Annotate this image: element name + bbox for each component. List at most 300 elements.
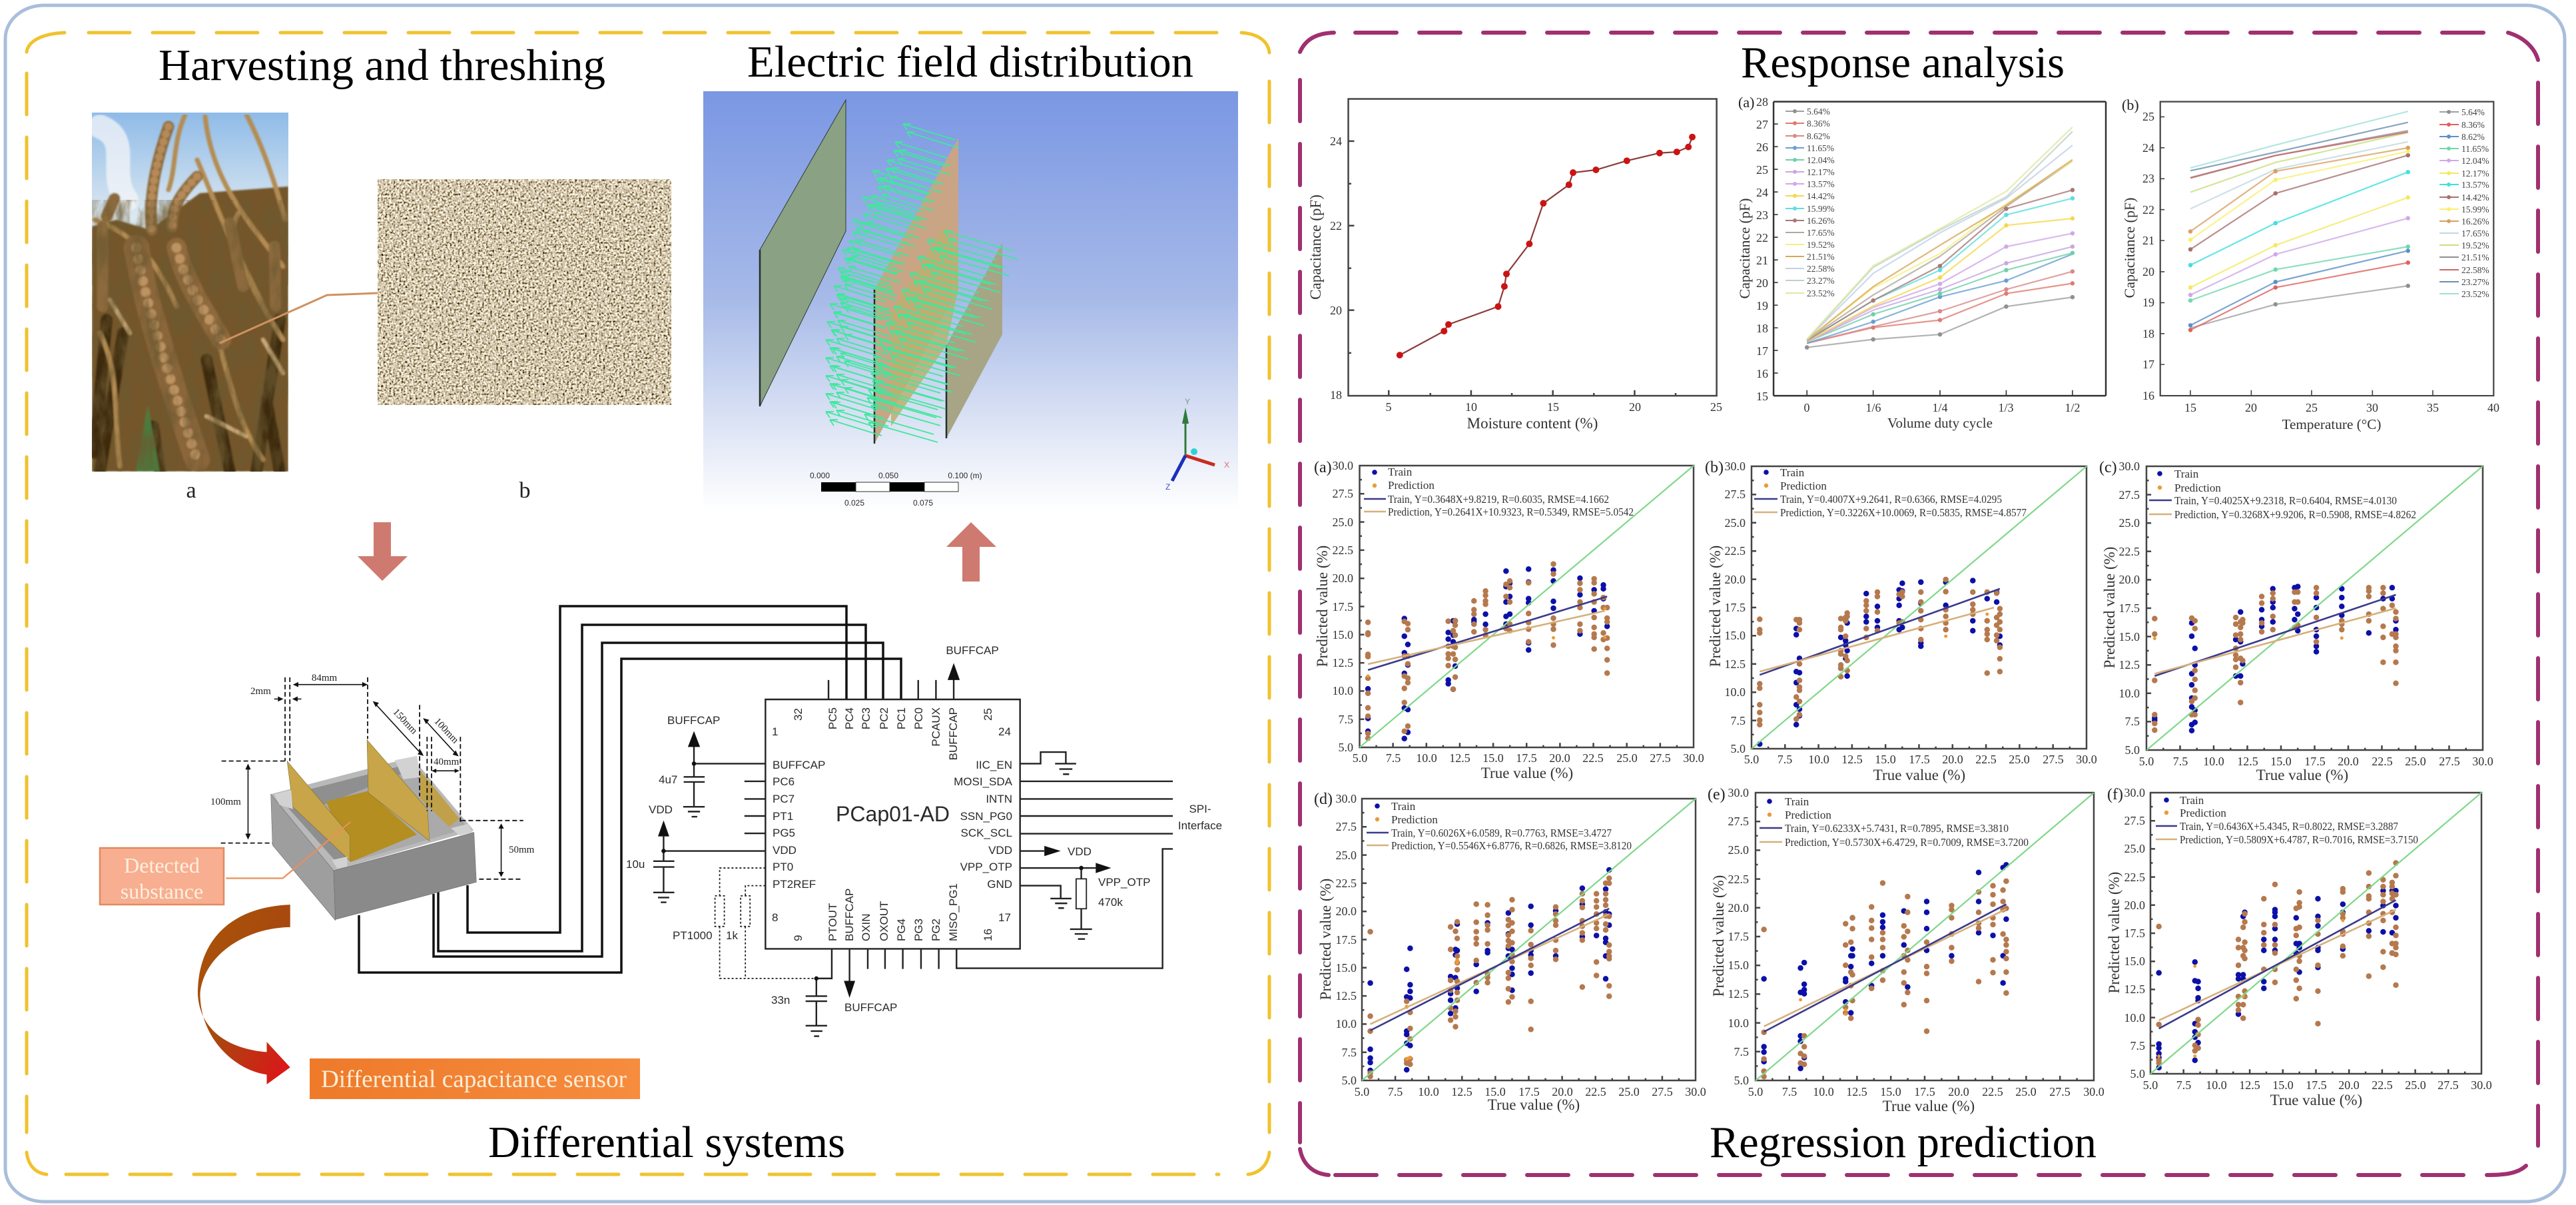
scatter (e): 5.0 bbox=[1748, 1085, 1763, 1098]
scatter (d): 30.0 bbox=[1685, 1085, 1706, 1098]
center plate bbox=[874, 138, 958, 444]
circuit text: 33n bbox=[771, 994, 790, 1006]
chart: capacitance vs volume duty cycle: 26 bbox=[1756, 141, 1768, 154]
scatter (f): True value (%) bbox=[2270, 1092, 2362, 1108]
circuit text: BUFFCAP bbox=[946, 644, 999, 657]
scatter (f) bbox=[2106, 786, 2492, 1108]
title: Response analysis: Response analysis bbox=[1741, 38, 2065, 87]
scatter (b): 22.5 bbox=[1975, 753, 1997, 766]
circuit text: 4u7 bbox=[659, 773, 677, 786]
scatter (d): 20.0 bbox=[1336, 905, 1357, 918]
scatter (f): 20.0 bbox=[2124, 899, 2145, 912]
scatter (c): 12.5 bbox=[2237, 755, 2258, 768]
scatter (f): 12.5 bbox=[2239, 1078, 2260, 1092]
leader to callout bbox=[226, 822, 351, 879]
scatter (e): 10.0 bbox=[1728, 1016, 1749, 1030]
circuit text: PT2REF bbox=[773, 878, 816, 891]
scatter (b): 5.0 bbox=[1730, 742, 1746, 755]
chart: capacitance vs temperature: 20 bbox=[2142, 265, 2154, 278]
axis triad bbox=[1165, 397, 1229, 492]
legend: Prediction, Y=0.5546X+6.8776, R=0.6826, RMSE=3.8120 bbox=[1391, 839, 1632, 852]
scatter (a): 5.0 bbox=[1339, 741, 1353, 754]
scatter (c): 27.5 bbox=[2439, 755, 2460, 768]
scatter (f): 5.0 bbox=[2143, 1078, 2158, 1092]
legend: Prediction, Y=0.3268X+9.9206, R=0.5908, RMSE=4.8262 bbox=[2174, 508, 2416, 521]
scatter (b): 12.5 bbox=[1841, 753, 1863, 766]
legend: 13.57% bbox=[2461, 180, 2489, 190]
scatter (f): 20.0 bbox=[2338, 1078, 2360, 1092]
legend: 11.65% bbox=[1807, 143, 1834, 153]
circuit text: VPP_OTP bbox=[1098, 876, 1150, 889]
circuit text: 24 bbox=[998, 725, 1011, 738]
scatter (f): 17.5 bbox=[2306, 1078, 2327, 1092]
scatter (c): 20.0 bbox=[2119, 573, 2140, 586]
legend: 15.99% bbox=[2461, 204, 2489, 214]
legend bbox=[1760, 795, 2029, 849]
legend: Prediction bbox=[2174, 482, 2221, 494]
title: Regression prediction: Regression prediction bbox=[1710, 1118, 2096, 1167]
circuit text: PC6 bbox=[773, 775, 795, 788]
legend: Train bbox=[2180, 794, 2204, 807]
scatter (d): 12.5 bbox=[1451, 1085, 1472, 1098]
scale bar: 0.000 bbox=[810, 471, 830, 480]
legend: Train bbox=[1388, 466, 1413, 478]
scatter (e): 20.0 bbox=[1728, 901, 1749, 915]
panel: right magenta dashed frame bbox=[1300, 33, 2538, 1175]
chart: capacitance vs moisture content: 18 bbox=[1330, 388, 1342, 402]
chart: capacitance vs moisture content: Capacitance (pF) bbox=[1307, 195, 1324, 300]
scatter (d): 10.0 bbox=[1336, 1017, 1357, 1030]
scatter (d): 10.0 bbox=[1418, 1085, 1439, 1098]
circuit text: MOSI_SDA bbox=[954, 775, 1013, 788]
scatter (e): 10.0 bbox=[1813, 1085, 1834, 1098]
scatter (b): 7.5 bbox=[1777, 753, 1792, 766]
circuit text: 1 bbox=[772, 725, 778, 738]
scatter (d): 27.5 bbox=[1336, 820, 1357, 833]
scatter (d): True value (%) bbox=[1488, 1096, 1580, 1113]
panel label: (a) bbox=[1314, 459, 1332, 476]
scatter (b): 17.5 bbox=[1725, 601, 1746, 614]
chart: capacitance vs volume duty cycle: 22 bbox=[1756, 231, 1768, 244]
scatter (b): 27.5 bbox=[1725, 488, 1746, 501]
chart: capacitance vs volume duty cycle: 1/3 bbox=[1998, 401, 2014, 414]
scatter (a): 17.5 bbox=[1516, 751, 1537, 765]
circuit schematic bbox=[626, 644, 1222, 1036]
right plate bbox=[946, 243, 1002, 438]
legend: 23.52% bbox=[2461, 289, 2489, 299]
callout: detected substance: Detected bbox=[124, 853, 200, 877]
axis triad: X bbox=[1224, 460, 1229, 470]
scatter (d): 15.0 bbox=[1336, 961, 1357, 975]
circuit text: PC3 bbox=[860, 707, 872, 729]
scatter (b): 5.0 bbox=[1744, 753, 1759, 766]
dimension labels: 40mm bbox=[434, 757, 460, 767]
legend: 8.62% bbox=[2461, 132, 2485, 142]
legend: Train bbox=[1785, 795, 1809, 808]
dimension labels: 100mm bbox=[432, 716, 461, 746]
scatter (b): 30.0 bbox=[1725, 460, 1746, 473]
circuit text: PCAUX bbox=[930, 707, 942, 747]
scatter (e): 15.0 bbox=[1728, 959, 1749, 972]
scatter (d): 12.5 bbox=[1336, 989, 1357, 1003]
scatter (c): 10.0 bbox=[2203, 755, 2224, 768]
base body bbox=[271, 757, 474, 871]
circuit text: 25 bbox=[982, 708, 994, 721]
legend: Prediction bbox=[1388, 479, 1435, 492]
scatter (a): 25.0 bbox=[1616, 751, 1638, 765]
scatter (b): True value (%) bbox=[1873, 767, 1965, 783]
scatter (a): 5.0 bbox=[1353, 751, 1367, 765]
circuit text: 10u bbox=[626, 858, 645, 871]
chart: capacitance vs temperature: 30 bbox=[2366, 401, 2378, 414]
scatter (f): 25.0 bbox=[2405, 1078, 2426, 1092]
legend: Train, Y=0.6233X+5.7431, R=0.7895, RMSE=3.3810 bbox=[1785, 822, 2009, 835]
scatter (b): 27.5 bbox=[2043, 753, 2064, 766]
circuit text: PT1 bbox=[773, 810, 793, 823]
callout: detected substance bbox=[100, 848, 224, 905]
legend: 12.17% bbox=[2461, 169, 2489, 179]
legend: Train bbox=[1780, 466, 1805, 479]
circuit text: SPI- bbox=[1189, 803, 1211, 815]
photo a: millet plants bbox=[92, 113, 288, 472]
circuit text: PC0 bbox=[912, 707, 925, 729]
chart: capacitance vs temperature: 23 bbox=[2142, 172, 2154, 185]
scatter (e): 5.0 bbox=[1734, 1074, 1749, 1087]
scatter (b): 7.5 bbox=[1730, 714, 1746, 727]
scatter (c): 5.0 bbox=[2124, 743, 2140, 757]
legend: 23.27% bbox=[2461, 277, 2489, 287]
chart: capacitance vs temperature: Capacitance (pF) bbox=[2121, 198, 2138, 298]
circuit text: VPP_OTP bbox=[960, 861, 1012, 873]
chart: capacitance vs temperature bbox=[2121, 97, 2499, 432]
label box: differential capacitance sensor: Differential capacitance sensor bbox=[321, 1066, 627, 1093]
axis triad: Y bbox=[1185, 397, 1190, 406]
connector line between photos bbox=[220, 293, 378, 343]
scatter (a): True value (%) bbox=[1481, 765, 1573, 781]
chart: capacitance vs volume duty cycle: 18 bbox=[1756, 322, 1768, 335]
circuit text: PCap01-AD bbox=[836, 802, 950, 826]
legend bbox=[1754, 466, 2027, 519]
scale bar: 0.050 bbox=[878, 471, 898, 480]
dimension labels: 150mm bbox=[390, 707, 420, 737]
chart: capacitance vs moisture content: 25 bbox=[1710, 400, 1722, 414]
panel label: (c) bbox=[2099, 459, 2117, 476]
electric field simulation bbox=[703, 91, 1238, 510]
circuit text: 1k bbox=[726, 929, 738, 942]
scatter (a): 20.0 bbox=[1332, 572, 1353, 585]
panel label: (b) bbox=[1705, 459, 1724, 476]
label b: b bbox=[519, 478, 530, 503]
title: Differential systems: Differential systems bbox=[488, 1118, 845, 1167]
scatter (e): Predicted value (%) bbox=[1710, 875, 1727, 997]
legend: 11.65% bbox=[2461, 144, 2489, 154]
chart: capacitance vs volume duty cycle: 1/6 bbox=[1865, 401, 1881, 414]
scale bar bbox=[810, 471, 982, 508]
chart: capacitance vs volume duty cycle: Capacitance (pF) bbox=[1736, 199, 1753, 298]
scatter (d) bbox=[1314, 791, 1706, 1113]
legend: Prediction bbox=[1780, 480, 1827, 492]
scatter (f): 25.0 bbox=[2124, 842, 2145, 855]
scatter (f): 5.0 bbox=[2130, 1067, 2145, 1080]
legend bbox=[1364, 466, 1634, 518]
circuit text: PC5 bbox=[826, 707, 839, 729]
scatter (f): 12.5 bbox=[2124, 983, 2145, 996]
legend: 21.51% bbox=[2461, 252, 2489, 262]
chart: capacitance vs volume duty cycle: 28 bbox=[1756, 95, 1768, 109]
circuit text: 470k bbox=[1098, 896, 1123, 909]
scatter (c): 5.0 bbox=[2139, 755, 2154, 768]
chart: capacitance vs moisture content: 20 bbox=[1629, 400, 1641, 414]
legend: 16.26% bbox=[2461, 216, 2489, 226]
legend: 22.58% bbox=[2461, 265, 2489, 275]
scatter (b): 15.0 bbox=[1725, 629, 1746, 642]
callout: detected substance: substance bbox=[121, 879, 203, 903]
chart: capacitance vs volume duty cycle: 16 bbox=[1756, 367, 1768, 380]
legend: 17.65% bbox=[1807, 228, 1835, 238]
dimension labels: 100mm bbox=[210, 797, 241, 807]
scatter (a): 30.0 bbox=[1332, 459, 1353, 472]
chart: capacitance vs moisture content: 20 bbox=[1330, 304, 1342, 317]
scatter (c): 10.0 bbox=[2119, 687, 2140, 700]
scatter (c): 15.0 bbox=[2270, 755, 2292, 768]
circuit lines bbox=[653, 663, 1173, 1036]
chart: capacitance vs volume duty cycle: 1/2 bbox=[2065, 401, 2081, 414]
scatter (f): 15.0 bbox=[2124, 955, 2145, 968]
legend: Train, Y=0.4007X+9.2641, R=0.6366, RMSE=4.0295 bbox=[1780, 493, 2002, 506]
label a: a bbox=[186, 478, 196, 503]
circuit text: MISO_PG1 bbox=[947, 883, 960, 941]
legend: 5.64% bbox=[2461, 107, 2485, 117]
scatter (b): 30.0 bbox=[2076, 753, 2097, 766]
grain fill bbox=[326, 791, 417, 862]
scatter (b): 20.0 bbox=[1942, 753, 1963, 766]
scatter (e): 22.5 bbox=[1728, 873, 1749, 886]
scatter (d): Predicted value (%) bbox=[1317, 879, 1334, 1000]
scatter (f): 22.5 bbox=[2124, 871, 2145, 884]
scatter (b): 10.0 bbox=[1808, 753, 1829, 766]
circuit text: PC1 bbox=[895, 707, 908, 729]
circuit text: PG2 bbox=[930, 919, 942, 941]
chart: capacitance vs temperature: 24 bbox=[2142, 141, 2154, 155]
chart: capacitance vs moisture content: 15 bbox=[1547, 400, 1559, 414]
overlap tint bbox=[891, 226, 958, 426]
field arrows bbox=[826, 124, 1018, 442]
circuit text bbox=[626, 644, 1222, 1014]
legend: Prediction bbox=[1391, 813, 1438, 826]
chart: capacitance vs moisture content: 10 bbox=[1465, 400, 1477, 414]
scatter (a): 22.5 bbox=[1332, 544, 1353, 557]
legend: 5.64% bbox=[1807, 107, 1830, 117]
axis triad: Z bbox=[1165, 482, 1170, 492]
circuit text: Interface bbox=[1178, 819, 1222, 832]
scatter (e): 12.5 bbox=[1846, 1085, 1867, 1098]
scatter (a): 15.0 bbox=[1332, 628, 1353, 641]
scatter (e): 27.5 bbox=[1728, 815, 1749, 828]
circuit text: 8 bbox=[772, 911, 778, 924]
panel label: (f) bbox=[2107, 786, 2123, 803]
circuit text: 32 bbox=[792, 708, 805, 721]
scatter (a): 25.0 bbox=[1332, 516, 1353, 529]
circuit text: BUFFCAP bbox=[773, 759, 825, 771]
legend: Train, Y=0.6436X+5.4345, R=0.8022, RMSE=3.2887 bbox=[2180, 820, 2398, 833]
legend: Prediction, Y=0.2641X+10.9323, R=0.5349, RMSE=5.0542 bbox=[1388, 506, 1634, 518]
label box: differential capacitance sensor bbox=[310, 1058, 640, 1099]
scatter (b) bbox=[1705, 459, 2097, 783]
circuit text: 9 bbox=[792, 935, 805, 941]
circuit text: 16 bbox=[982, 929, 994, 941]
chart: capacitance vs temperature: 19 bbox=[2142, 296, 2154, 309]
scatter (e) bbox=[1708, 786, 2104, 1114]
circuit text: VDD bbox=[649, 803, 673, 816]
scatter (c): 15.0 bbox=[2119, 630, 2140, 643]
scatter (e): 7.5 bbox=[1782, 1085, 1797, 1098]
scale bar: 0.100 (m) bbox=[948, 471, 982, 480]
legend: 13.57% bbox=[1807, 179, 1835, 189]
circuit text: BUFFCAP bbox=[844, 1001, 897, 1014]
dimension labels: 84mm bbox=[312, 673, 337, 683]
chart: capacitance vs volume duty cycle: 15 bbox=[1756, 390, 1768, 403]
scatter (a): 7.5 bbox=[1339, 713, 1353, 726]
circuit text: PG5 bbox=[773, 827, 795, 839]
scatter (b): 10.0 bbox=[1725, 685, 1746, 699]
scatter (b): 15.0 bbox=[1875, 753, 1896, 766]
scatter (a): 7.5 bbox=[1386, 751, 1401, 765]
chart: capacitance vs volume duty cycle: 21 bbox=[1756, 254, 1768, 267]
scatter (c): 7.5 bbox=[2124, 715, 2140, 728]
chart: capacitance vs volume duty cycle: 20 bbox=[1756, 276, 1768, 290]
circuit text: SSN_PG0 bbox=[960, 810, 1012, 823]
panel label: (a) bbox=[1738, 94, 1754, 111]
scatter (d): 22.5 bbox=[1336, 877, 1357, 890]
circuit text: SCK_SCL bbox=[961, 827, 1012, 839]
chart: capacitance vs temperature: 35 bbox=[2427, 401, 2439, 414]
chart: capacitance vs temperature: 40 bbox=[2487, 401, 2499, 414]
panel label: (d) bbox=[1314, 791, 1333, 808]
legend bbox=[2439, 107, 2489, 299]
scatter (c): 30.0 bbox=[2472, 755, 2493, 768]
legend: 12.04% bbox=[1807, 155, 1835, 165]
scatter (c): 22.5 bbox=[2119, 545, 2140, 558]
legend: Train, Y=0.6026X+6.0589, R=0.7763, RMSE=3.4727 bbox=[1391, 827, 1612, 839]
scatter (d): 15.0 bbox=[1484, 1085, 1506, 1098]
chart: capacitance vs temperature: 15 bbox=[2184, 401, 2196, 414]
legend: 17.65% bbox=[2461, 228, 2489, 238]
legend: 12.17% bbox=[1807, 167, 1835, 177]
chart: capacitance vs moisture content bbox=[1307, 99, 1722, 432]
scatter (f): 15.0 bbox=[2272, 1078, 2294, 1092]
legend: 21.51% bbox=[1807, 252, 1835, 262]
scatter (d): 17.5 bbox=[1518, 1085, 1540, 1098]
scatter (d): 5.0 bbox=[1355, 1085, 1369, 1098]
legend: Train bbox=[1391, 800, 1416, 813]
scatter (e): True value (%) bbox=[1883, 1098, 1975, 1114]
scatter (d): 25.0 bbox=[1618, 1085, 1640, 1098]
circuit text: PT0 bbox=[773, 861, 793, 873]
scatter (b): 25.0 bbox=[1725, 516, 1746, 530]
plates bbox=[287, 761, 350, 861]
curved arrow bbox=[198, 905, 290, 1084]
legend: 19.52% bbox=[2461, 240, 2489, 250]
chart: capacitance vs temperature: 22 bbox=[2142, 203, 2154, 216]
legend: 8.36% bbox=[1807, 119, 1830, 129]
chart: capacitance vs volume duty cycle: 25 bbox=[1756, 163, 1768, 177]
scatter (c): True value (%) bbox=[2256, 767, 2348, 783]
arrow: down to sensor bbox=[358, 522, 408, 581]
circuit text: BUFFCAP bbox=[843, 889, 856, 941]
scale bar: 0.025 bbox=[844, 498, 864, 508]
scatter (c): 20.0 bbox=[2338, 755, 2359, 768]
dimension labels: 50mm bbox=[509, 845, 535, 855]
chart: capacitance vs moisture content: Moisture content (%) bbox=[1467, 415, 1598, 432]
legend: Train, Y=0.3648X+9.8219, R=0.6035, RMSE=4.1662 bbox=[1388, 493, 1609, 506]
chart: capacitance vs temperature: 20 bbox=[2245, 401, 2257, 414]
chart: capacitance vs volume duty cycle: 1/4 bbox=[1932, 401, 1948, 414]
dimension labels bbox=[210, 673, 535, 855]
circuit text: INTN bbox=[986, 793, 1012, 805]
circuit text: BUFFCAP bbox=[667, 714, 720, 727]
legend: 8.36% bbox=[2461, 120, 2485, 130]
left plate bbox=[760, 100, 846, 406]
legend: 8.62% bbox=[1807, 131, 1830, 141]
scatter (c): 27.5 bbox=[2119, 488, 2140, 502]
circuit text: VDD bbox=[1068, 845, 1092, 858]
circuit text: VDD bbox=[988, 844, 1012, 857]
chart: capacitance vs temperature: 18 bbox=[2142, 327, 2154, 340]
scatter (f): 7.5 bbox=[2130, 1039, 2145, 1052]
chart: capacitance vs volume duty cycle: 19 bbox=[1756, 299, 1768, 312]
scatter (b): Predicted value (%) bbox=[1707, 546, 1724, 667]
chart: capacitance vs volume duty cycle: 27 bbox=[1756, 118, 1768, 131]
circuit text: BUFFCAP bbox=[947, 707, 960, 760]
scatter (f): Predicted value (%) bbox=[2106, 872, 2122, 993]
scatter (e): 22.5 bbox=[1982, 1085, 2003, 1098]
scatter (a): 20.0 bbox=[1549, 751, 1570, 765]
3D sensor box bbox=[221, 677, 523, 921]
scatter (a): 17.5 bbox=[1332, 600, 1353, 613]
scatter (c): 17.5 bbox=[2119, 602, 2140, 615]
scatter (c): Predicted value (%) bbox=[2101, 547, 2118, 668]
circuit text: PTOUT bbox=[826, 903, 839, 941]
circuit text: PC7 bbox=[773, 793, 795, 805]
scatter (e): 12.5 bbox=[1728, 987, 1749, 1001]
scatter (d): 30.0 bbox=[1336, 792, 1357, 805]
chart: capacitance vs volume duty cycle: 23 bbox=[1756, 208, 1768, 222]
circuit text: IIC_EN bbox=[976, 759, 1012, 771]
chart: capacitance vs volume duty cycle: 0 bbox=[1803, 401, 1810, 414]
legend bbox=[1785, 107, 1835, 298]
circuit text: OXOUT bbox=[878, 901, 890, 941]
scatter (a): 12.5 bbox=[1449, 751, 1470, 765]
chart: capacitance vs moisture content: 24 bbox=[1330, 135, 1342, 148]
scatter (c): 22.5 bbox=[2372, 755, 2393, 768]
circuit text: PG3 bbox=[912, 919, 925, 941]
scatter (c): 7.5 bbox=[2173, 755, 2188, 768]
circuit text: OXIN bbox=[860, 913, 872, 941]
legend: Prediction, Y=0.3226X+10.0069, R=0.5835, RMSE=4.8577 bbox=[1780, 506, 2027, 519]
scatter (a): 22.5 bbox=[1582, 751, 1604, 765]
scatter (a): 15.0 bbox=[1482, 751, 1504, 765]
scatter (f): 10.0 bbox=[2124, 1011, 2145, 1024]
scatter (d): 7.5 bbox=[1341, 1046, 1357, 1059]
scatter (b): 20.0 bbox=[1725, 573, 1746, 586]
circuit text: PC4 bbox=[843, 707, 856, 729]
scatter (c): 25.0 bbox=[2405, 755, 2426, 768]
legend: 22.58% bbox=[1807, 264, 1835, 274]
scatter (c): 17.5 bbox=[2304, 755, 2326, 768]
scatter (c): 12.5 bbox=[2119, 658, 2140, 671]
scatter (e): 17.5 bbox=[1728, 930, 1749, 943]
scatter (c) bbox=[2099, 459, 2493, 783]
